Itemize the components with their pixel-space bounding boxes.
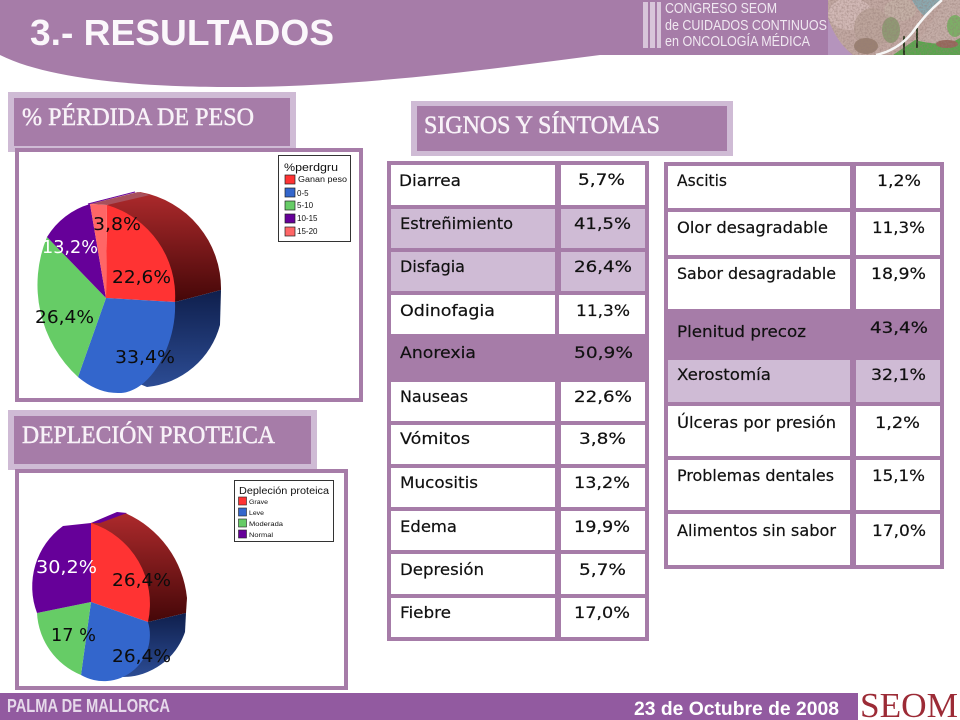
row: Vómitos: Vómitos <box>400 429 470 448</box>
row: Vómitos: 3,8% <box>579 429 626 448</box>
row: Xerostomía: Xerostomía <box>677 365 771 384</box>
pie depth blue <box>130 290 221 387</box>
row: Depresión: 5,7% <box>579 560 626 579</box>
row: Alimentos sin sabor: Alimentos sin sabor <box>677 521 836 540</box>
pie slice green <box>37 602 91 675</box>
row: Diarrea <box>391 165 645 205</box>
row: Ascitis: Ascitis <box>677 171 727 190</box>
legend: 10-15 <box>297 214 318 223</box>
row: Disfagia: Disfagia <box>400 257 465 276</box>
row: Problemas dentales: 15,1% <box>872 466 925 485</box>
row: Depresión <box>391 554 645 594</box>
row: Plenitud precoz <box>677 318 928 341</box>
row: Fiebre: Fiebre <box>400 603 451 622</box>
table: síntomas columna 2 <box>664 162 944 569</box>
row: Edema: 19,9% <box>574 517 630 536</box>
row: Anorexia: Anorexia <box>400 343 476 362</box>
footer location: PALMA DE MALLORCA <box>7 696 170 716</box>
row: Olor desagradable: 11,3% <box>872 218 925 237</box>
panel heading: % pérdida de peso <box>8 92 296 152</box>
row: Mucositis <box>391 468 645 507</box>
panel heading: signos y síntomas <box>411 101 733 156</box>
congress logo: en ONCOLOGÍA MÉDICA <box>665 33 810 50</box>
table: síntomas columna 1 <box>387 161 649 641</box>
row: Diarrea: 5,7% <box>578 170 625 189</box>
panel heading: % pérdida de peso: % PÉRDIDA DE PESO <box>22 103 254 131</box>
pie labels: 3,8% <box>93 214 141 235</box>
pie labels: 30,2% <box>36 557 97 578</box>
row: Ascitis: 1,2% <box>877 171 921 190</box>
row: Nauseas: Nauseas <box>400 387 468 406</box>
row: Plenitud precoz: 43,4% <box>870 318 928 337</box>
legend: Ganan peso <box>298 175 348 184</box>
pie top sliver <box>91 512 127 523</box>
legend: Grave <box>249 499 268 506</box>
congress logo: CONGRESO SEOM <box>665 0 777 17</box>
pie slice red <box>106 205 175 302</box>
row: Alimentos sin sabor <box>668 514 940 565</box>
row: Mucositis: 13,2% <box>574 473 630 492</box>
legend: Depleción proteica <box>239 486 329 497</box>
pie depth red <box>91 513 187 622</box>
title: 3.- RESULTADOS <box>30 12 334 53</box>
row: Diarrea: Diarrea <box>399 171 461 190</box>
row: Estreñimiento: 41,5% <box>574 214 631 233</box>
row: Plenitud precoz: Plenitud precoz <box>677 322 806 341</box>
panel: pie chart depleción proteica <box>17 471 346 688</box>
pie labels: 26,4% <box>112 646 171 667</box>
panel heading: depleción proteica: DEPLECIÓN PROTEICA <box>22 421 275 449</box>
row: Edema <box>391 511 645 550</box>
row: Anorexia: 50,9% <box>574 343 633 362</box>
pie depth red <box>107 192 221 302</box>
footer date: 23 de Octubre de 2008 <box>634 699 839 720</box>
row: Sabor desagradable: 18,9% <box>871 264 926 283</box>
panel: pie chart % pérdida de peso <box>17 150 361 400</box>
pie slice blue <box>81 602 150 681</box>
row: Olor desagradable <box>668 212 940 255</box>
pie depth blue <box>120 613 186 677</box>
row: Estreñimiento: Estreñimiento <box>400 214 513 233</box>
pie slice green <box>37 237 106 377</box>
row: Problemas dentales <box>668 460 940 510</box>
row: Anorexia <box>400 343 633 362</box>
row: Alimentos sin sabor: 17,0% <box>872 521 926 540</box>
row: Problemas dentales: Problemas dentales <box>677 466 834 485</box>
row: Xerostomía: 32,1% <box>871 365 926 384</box>
pie labels <box>36 557 171 667</box>
row: Edema: Edema <box>400 517 457 536</box>
row: Sabor desagradable <box>668 259 940 309</box>
pie top sliver <box>90 192 150 205</box>
legend: 15-20 <box>297 227 318 236</box>
row: Estreñimiento <box>391 209 645 248</box>
pie labels: 26,4% <box>112 570 171 591</box>
header band <box>0 0 960 87</box>
legend: %perdgru <box>284 162 338 174</box>
pie labels: 26,4% <box>35 307 94 328</box>
header photo: almond trees <box>828 0 960 55</box>
legend <box>278 156 350 242</box>
row: Odinofagia: Odinofagia <box>400 301 495 320</box>
row: Nauseas <box>391 382 645 421</box>
row: Odinofagia <box>391 295 645 334</box>
row: Fiebre <box>391 598 645 637</box>
panel heading: signos y síntomas: SIGNOS Y SÍNTOMAS <box>424 111 660 139</box>
row: Úlceras por presión <box>668 406 940 456</box>
legend <box>234 480 334 542</box>
legend: Moderada <box>249 521 283 528</box>
legend: Leve <box>249 510 264 517</box>
row: Sabor desagradable: Sabor desagradable <box>677 264 836 283</box>
row: Fiebre: 17,0% <box>574 603 630 622</box>
legend: 0-5 <box>297 189 309 198</box>
row: Xerostomía <box>668 360 940 402</box>
row: Úlceras por presión: Úlceras por presión <box>677 413 836 432</box>
congress logo <box>643 0 827 50</box>
row: Depresión: Depresión <box>400 560 484 579</box>
pie labels: 17 % <box>51 625 96 646</box>
row: Nauseas: 22,6% <box>574 387 632 406</box>
pie slice red <box>91 523 150 622</box>
row: Odinofagia: 11,3% <box>576 301 630 320</box>
pie labels: 13,2% <box>42 237 98 258</box>
congress logo: de CUIDADOS CONTINUOS <box>665 17 827 34</box>
footer band <box>0 693 858 720</box>
legend: Normal <box>249 532 274 539</box>
row: Mucositis: Mucositis <box>400 473 478 492</box>
legend: 5-10 <box>297 201 314 210</box>
row: Olor desagradable: Olor desagradable <box>677 218 828 237</box>
pie labels: 22,6% <box>112 267 171 288</box>
pie slice purple <box>32 523 91 613</box>
panel heading: depleción proteica <box>8 410 317 470</box>
row: Ascitis <box>668 166 940 208</box>
row: Disfagia: 26,4% <box>574 257 632 276</box>
row: Úlceras por presión: 1,2% <box>875 413 920 432</box>
row: Disfagia <box>391 252 645 291</box>
pie labels: 33,4% <box>115 347 175 368</box>
pie slice blue <box>78 298 175 393</box>
pie slice light red <box>90 204 107 298</box>
pie labels <box>35 214 175 368</box>
pie slice purple <box>47 204 106 298</box>
row: Vómitos <box>391 425 645 464</box>
